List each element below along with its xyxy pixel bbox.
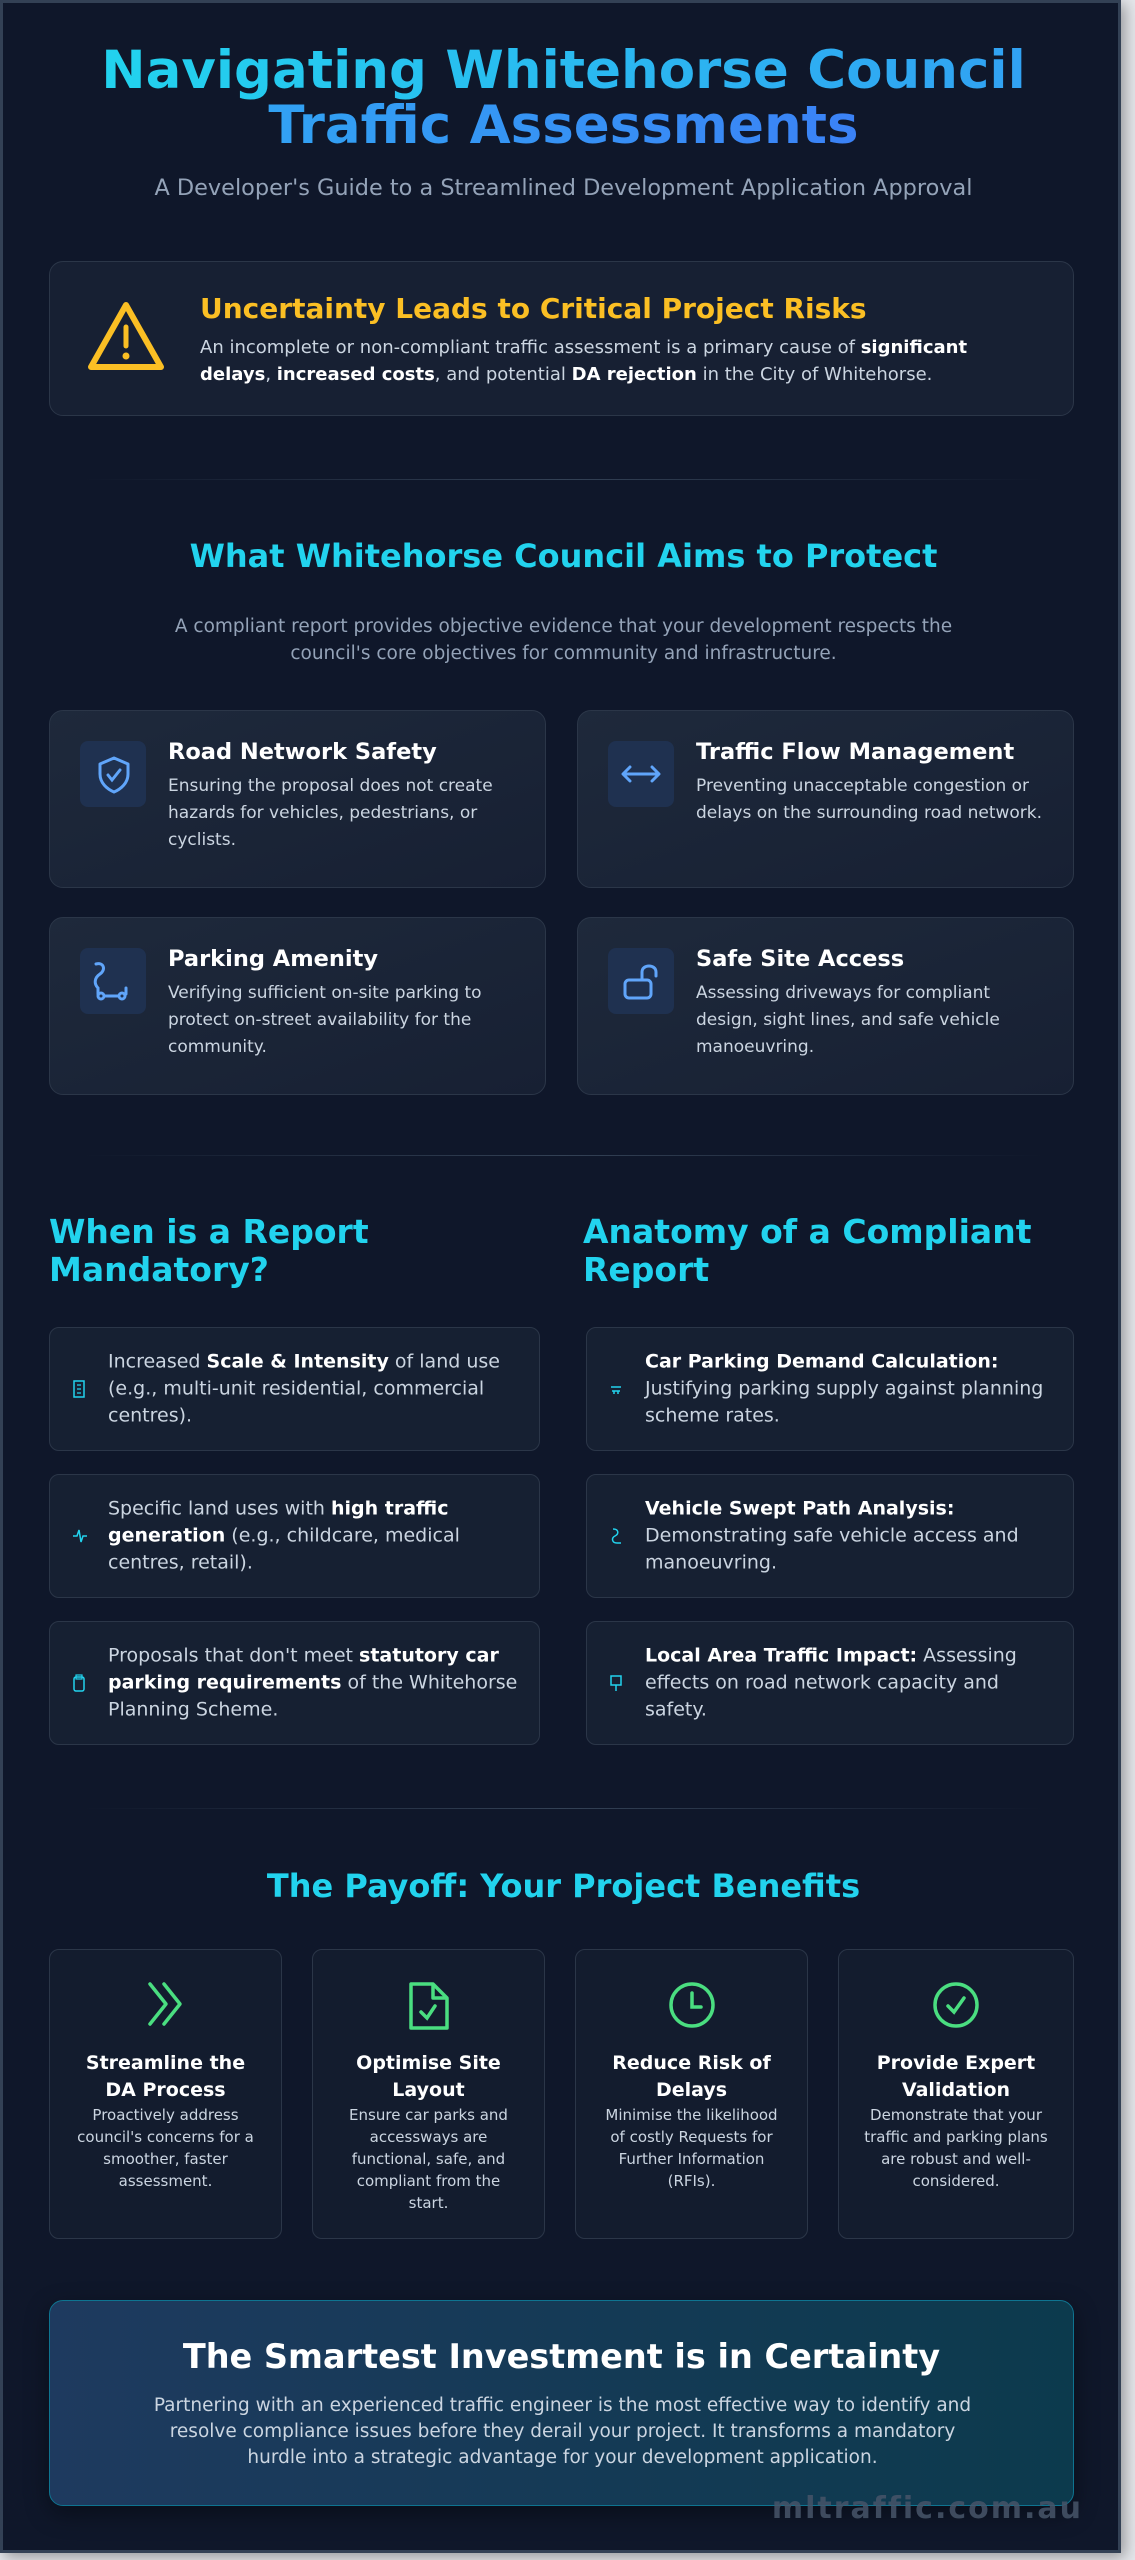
benefit: streamline: Streamline the DA Process [86,2052,245,2101]
heading: anatomy: Anatomy of a Compliant Report [583,1212,1031,1289]
panel: traffic flow [577,710,1074,888]
benefit: reduce risk [575,1949,808,2239]
heading: payoff: The Payoff: Your Project Benefits [267,1867,860,1905]
benefit: streamline [49,1949,282,2239]
item: car parking demand [586,1327,1074,1451]
icon: route [80,948,146,1014]
title: Navigating Whitehorse Council [101,40,1026,101]
icon: building [73,1380,85,1398]
panel: road network safety: Ensuring the proposal does not create hazards for vehicles, pedestrians, or cyclists. [168,776,493,850]
icon: check circle [933,1982,979,2028]
item: swept path: Vehicle Swept Path Analysis: Demonstrating safe vehicle access and manoeuvring. [645,1498,1019,1574]
panel: traffic flow: Preventing unacceptable congestion or delays on the surrounding road network. [696,776,1042,823]
item: scale: Increased Scale & Intensity of land use (e.g., multi-unit residential, commercial centres). [108,1350,500,1426]
callout: smartest investment: Partnering with an experienced traffic engineer is the most effective way to identify and resolve compliance issues before they derail your project. It transforms a mandatory hurdle into a strategic advantage for your development application. [154,2395,971,2468]
panel: parking amenity: Verifying sufficient on-site parking to protect on-street availability for the community. [168,983,482,1057]
panel: safe site access [577,917,1074,1095]
icon: pulse [73,1530,87,1542]
benefit: optimise: Ensure car parks and accessways are functional, safe, and compliant from the start. [349,2106,508,2212]
subtitle: A Developer's Guide to a Streamlined Development Application Approval [154,175,972,201]
panel: road network safety [49,710,546,888]
icon: sign [610,1675,622,1691]
panel: road network safety: Road Network Safety [168,739,437,765]
watermark: mltraffic.com.au [772,2491,1083,2526]
icon: shield [80,741,146,807]
icon: arrows [608,741,674,807]
icon: path [612,1528,621,1544]
icon: unlock [608,948,674,1014]
panel: safe site access: Safe Site Access [696,946,904,972]
icon: document check [409,1982,449,2030]
item: high traffic [49,1474,540,1598]
warning text [200,292,967,385]
item: scale [49,1327,540,1451]
icon: clock [669,1982,715,2028]
item: high traffic: Specific land uses with high traffic generation (e.g., childcare, medical centres, retail). [108,1498,460,1574]
icon: chevrons [148,1982,182,2026]
item: car parking demand: Car Parking Demand Calculation: Justifying parking supply against planning scheme rates. [645,1350,1043,1426]
warning text: An incomplete or non-compliant traffic assessment is a primary cause of significant delays, increased costs, and potential DA rejection in the City of Whitehorse. [200,337,967,385]
item: parking requirements: Proposals that don't meet statutory car parking requirements of the Whitehorse Planning Scheme. [108,1644,517,1720]
callout: smartest investment: The Smartest Investment is in Certainty [183,2337,940,2376]
intro text: A compliant report provides objective evidence that your development respects the council's core objectives for community and infrastructure. [175,616,952,664]
benefit: optimise: Optimise Site Layout [356,2052,501,2101]
icon: car [611,1386,621,1394]
warning text: Uncertainty Leads to Critical Project Risks [200,292,867,325]
icon: clipboard [73,1674,85,1692]
item: local area traffic: Local Area Traffic Impact: Assessing effects on road network capacity and safety. [645,1644,1017,1720]
icon: warning [88,302,164,370]
benefit: optimise [312,1949,545,2239]
benefit: expert validation: Provide Expert Validation [877,2052,1035,2101]
title: Traffic Assessments [268,95,859,156]
panel: safe site access: Assessing driveways for compliant design, sight lines, and safe vehicle manoeuvring. [696,983,1000,1057]
callout: smartest investment [49,2300,1074,2506]
heading: mandatory: When is a Report Mandatory? [49,1212,369,1289]
item: parking requirements [49,1621,540,1745]
benefit: reduce risk: Minimise the likelihood of costly Requests for Further Information (RFIs). [605,2106,778,2190]
panel: parking amenity [49,917,546,1095]
title [101,40,1026,156]
heading: aims: What Whitehorse Council Aims to Protect [190,537,937,575]
panel: traffic flow: Traffic Flow Management [696,739,1014,765]
panel: parking amenity: Parking Amenity [168,946,378,972]
warning panel [49,261,1074,416]
benefit: expert validation: Demonstrate that your traffic and parking plans are robust and well-considered. [864,2106,1048,2190]
item: local area traffic [586,1621,1074,1745]
benefit: reduce risk: Reduce Risk of Delays [612,2052,771,2101]
benefit: streamline: Proactively address council's concerns for a smoother, faster assessment. [77,2106,254,2190]
item: swept path [586,1474,1074,1598]
benefit: expert validation [838,1949,1074,2239]
